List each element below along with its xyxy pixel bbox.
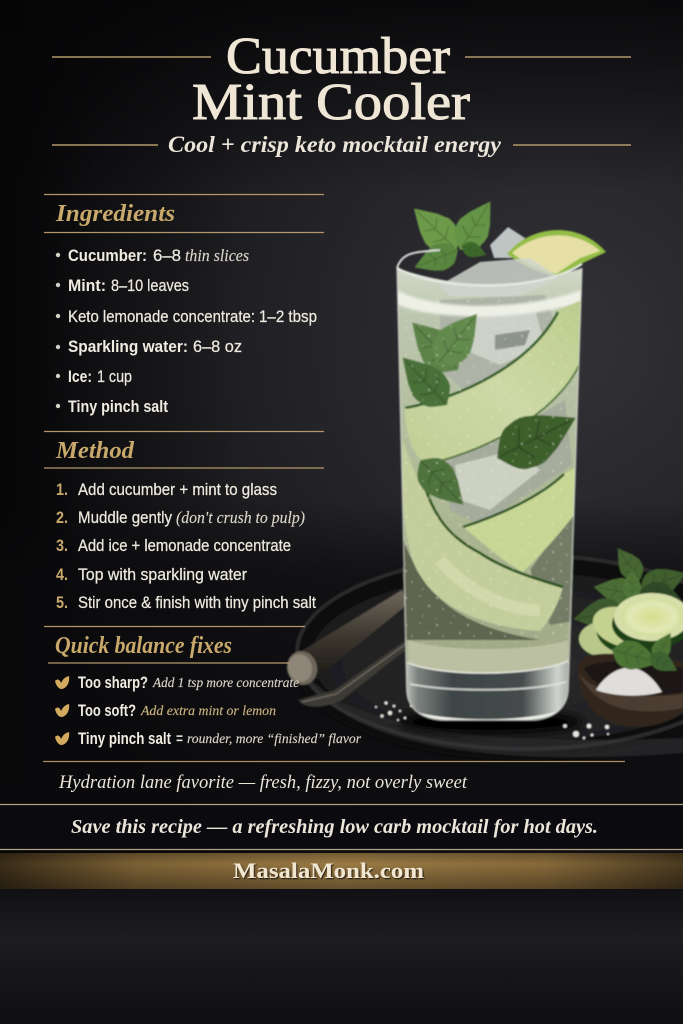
fix: tiny pinch salt	[55, 730, 362, 748]
salt bowl	[578, 654, 683, 727]
serving tray	[293, 553, 683, 760]
heading: quick balance fixes: Quick balance fixes	[55, 633, 232, 659]
method steps: 4.	[56, 566, 68, 584]
method steps: Muddle gently	[78, 509, 173, 527]
glass edges	[397, 268, 582, 720]
highball glass	[389, 255, 590, 722]
panel: quick balance fixes	[44, 626, 362, 748]
mint leaves in glass	[402, 313, 478, 506]
mint sprig garnish	[402, 193, 504, 280]
ingredient list: 8–10 leaves	[111, 277, 189, 295]
method steps: Top with sparkling water	[78, 566, 247, 584]
top ice cube	[490, 227, 525, 258]
ingredient list: 1–2 tbsp	[259, 308, 317, 326]
ingredient list: 1 cup	[97, 368, 132, 386]
title: Mint Cooler	[192, 74, 470, 131]
method steps: Add cucumber + mint to glass	[78, 481, 277, 499]
method steps: 3.	[56, 537, 68, 555]
ingredient list: thin slices	[185, 246, 249, 265]
method steps: 2.	[56, 509, 68, 527]
subtitle: Cool + crisp keto mocktail energy	[168, 132, 502, 157]
method steps	[56, 481, 316, 612]
ingredient list: 6–8	[153, 247, 181, 265]
fix: too sharp: Add 1 tsp more concentrate	[152, 676, 299, 691]
fix: too soft	[55, 702, 276, 720]
title: Cucumber	[226, 28, 450, 85]
website band	[0, 853, 683, 889]
tagline: Hydration lane favorite — fresh, fizzy, not overly sweet	[58, 773, 468, 793]
lime wedge	[507, 230, 606, 277]
save banner: Save this recipe — a refreshing low carb mocktail for hot days.	[71, 816, 598, 838]
footer rule	[43, 760, 625, 762]
method steps: 1.	[56, 481, 68, 499]
fix: too soft: Add extra mint or lemon	[140, 704, 276, 719]
method steps: 5.	[56, 594, 68, 612]
method rule	[44, 467, 324, 469]
mint garnish on tray	[571, 542, 683, 634]
fix: too sharp: Too sharp?	[78, 674, 148, 692]
ingredient list: Sparkling water:	[68, 338, 188, 356]
method steps: Stir once & finish with tiny pinch salt	[78, 594, 316, 612]
method steps: Add ice + lemonade concentrate	[78, 537, 291, 555]
fix: too soft: Too soft?	[78, 702, 136, 720]
fizz bubbles	[404, 298, 578, 646]
drink photo illustration	[283, 193, 683, 760]
mint on bowl	[608, 628, 682, 678]
ingredient list: Cucumber:	[68, 247, 147, 265]
fix: tiny pinch salt: rounder, more “finished” flavor	[187, 732, 362, 747]
glass shadow	[398, 710, 582, 734]
foam line	[397, 290, 582, 316]
heading: ingredients: Ingredients	[55, 201, 175, 227]
ingredients rules	[44, 194, 324, 432]
ingredient list: Keto lemonade concentrate:	[68, 308, 255, 326]
ingredient list: 6–8 oz	[193, 338, 242, 356]
muddler	[283, 590, 408, 688]
cucumber ribbon middle	[463, 468, 575, 572]
fix: tiny pinch salt: =	[176, 730, 183, 748]
ingredient list	[56, 246, 317, 416]
dark lower left	[403, 541, 538, 641]
method steps: (don't crush to pulp)	[176, 508, 305, 527]
fix: tiny pinch salt: Tiny pinch salt	[78, 730, 171, 748]
mint leaf lower right	[496, 414, 576, 470]
fixes rules	[44, 626, 305, 663]
cucumber slices on tray	[579, 593, 683, 664]
spilled salt	[375, 702, 609, 739]
save banner	[0, 804, 683, 850]
title block	[52, 28, 631, 157]
ice cubes	[440, 295, 572, 525]
glass rim and top ice	[397, 250, 582, 296]
title	[192, 28, 470, 131]
cucumber ribbon top	[405, 300, 582, 465]
heading: method: Method	[55, 438, 135, 464]
title rules	[52, 57, 631, 145]
bar spoon	[298, 640, 408, 707]
website band: MasalaMonk.com	[233, 858, 424, 883]
cucumber ribbon lower	[402, 440, 563, 631]
ingredient list: Tiny pinch salt	[68, 398, 168, 416]
panel: ingredients	[44, 194, 324, 432]
panel: method	[44, 438, 324, 612]
ingredient list: Mint:	[68, 277, 106, 295]
ingredient list: Ice:	[68, 368, 92, 386]
glass base	[400, 640, 575, 722]
fix: too sharp	[55, 674, 299, 692]
